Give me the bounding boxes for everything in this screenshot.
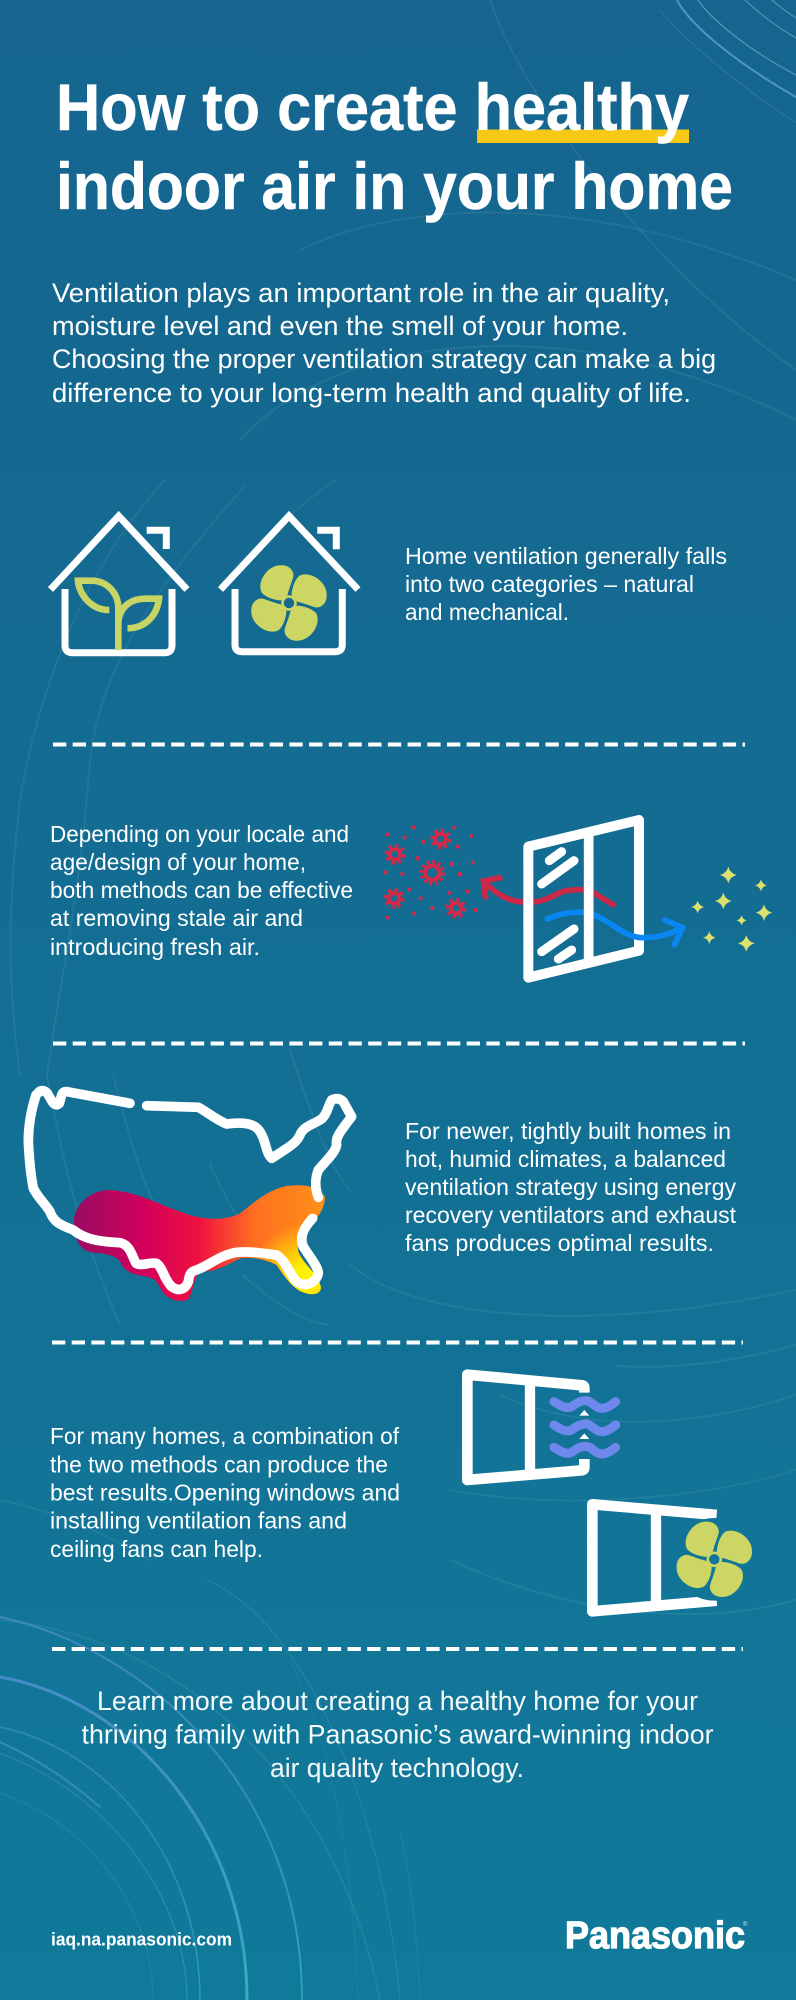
text: newer homes: fans produces optimal results. [405,1230,714,1256]
yellow highlight under healthy [477,130,689,143]
call to action text [82,1686,714,1783]
text: newer homes [405,1118,737,1256]
text: both methods: both methods can be effective [50,877,353,903]
intro paragraph [52,278,716,408]
text: both methods: age/design of your home, [50,849,306,875]
website url: iaq.na.panasonic.com [51,1928,232,1950]
icon: germs [384,825,477,919]
text: both methods [50,821,353,960]
title: indoor air in your home [56,149,733,223]
text: both methods: introducing fresh air. [50,934,260,960]
title: How to create healthy [56,70,689,144]
call to action text: air quality technology. [270,1753,524,1783]
Panasonic logo: Panasonic [565,1915,745,1957]
arcs bottom left [0,1580,420,2000]
icon: window with fan [592,1504,752,1611]
intro paragraph: difference to your long-term health and quality of life. [52,378,691,408]
text: two categories: and mechanical. [405,599,569,625]
text: combination: the two methods can produce the [50,1452,388,1478]
icon: open window with breeze [467,1375,616,1480]
text: two categories [405,543,727,625]
text: newer homes: hot, humid climates, a balanced [405,1146,726,1172]
icon: window with airflow arrows [483,820,683,978]
call to action text: thriving family with Panasonic’s award-winning indoor [82,1720,714,1750]
icon: house with plant [50,516,187,653]
call to action text: Learn more about creating a healthy home for your [97,1686,698,1716]
title [56,70,733,223]
intro paragraph: Ventilation plays an important role in the air quality, [52,278,670,308]
blue fresh air arrow [547,912,683,945]
text: newer homes: recovery ventilators and exhaust [405,1202,737,1228]
text: both methods: at removing stale air and [50,905,303,931]
Panasonic logo: ® [743,1921,748,1928]
icon: US map with hot humid region [28,1091,352,1301]
text: newer homes: ventilation strategy using energy [405,1174,736,1200]
arcs top right [660,0,796,123]
intro paragraph: Choosing the proper ventilation strategy can make a big [52,344,716,374]
text: combination: ceiling fans can help. [50,1536,263,1562]
intro paragraph: moisture level and even the smell of your home. [52,311,628,341]
text: combination: best results.Opening windows and [50,1480,400,1506]
text: two categories: Home ventilation generally falls [405,543,727,569]
icon: house with fan [220,516,358,652]
text: combination: For many homes, a combination of [50,1423,400,1449]
red stale air arrow [483,877,615,906]
icon: sparkles [691,867,772,952]
text: newer homes: For newer, tightly built homes in [405,1118,731,1144]
text: combination [50,1423,400,1562]
text: both methods: Depending on your locale and [50,821,349,847]
text: two categories: into two categories – natural [405,571,694,597]
text: combination: installing ventilation fans and [50,1508,347,1534]
